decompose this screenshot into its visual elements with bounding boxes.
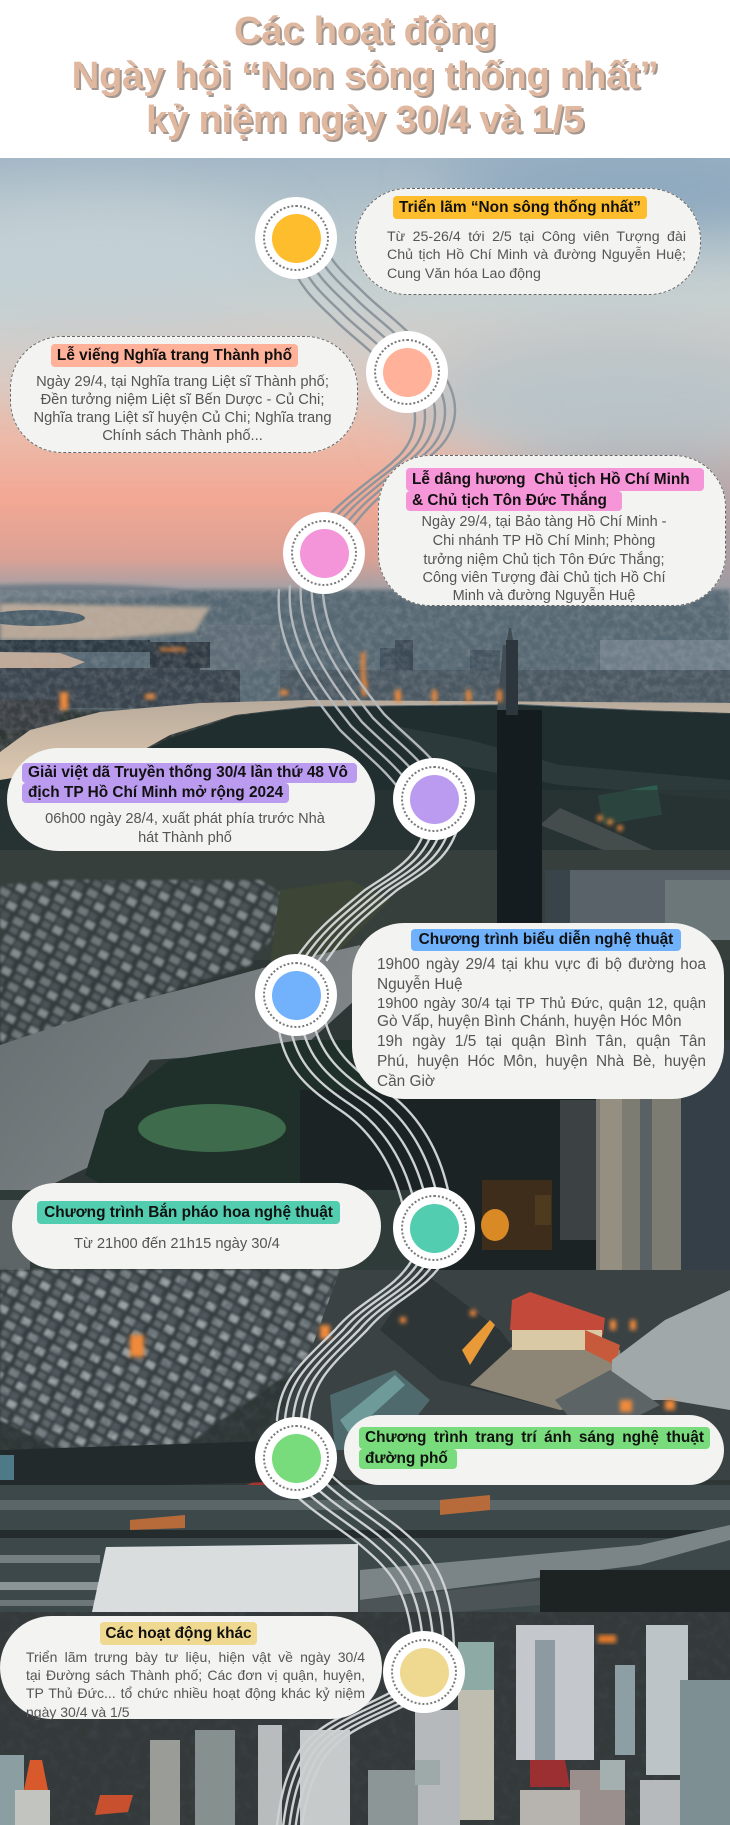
text block: 19h ngày 1/5 tại quận Bình Tân, quận Tân: [377, 1033, 706, 1050]
villas: [0, 1270, 350, 1470]
text block: [421, 514, 667, 604]
text block: [26, 1649, 365, 1720]
title: kỷ niệm ngày 30/4 và 1/5: [146, 98, 584, 140]
city lights: [60, 648, 675, 1412]
text block: Công viên Tượng đài Chủ tịch Hồ Chí: [422, 570, 666, 586]
highway: [0, 1485, 730, 1620]
dark land: [0, 705, 730, 900]
lower buildings: [0, 1612, 730, 1825]
text block: Chủ tịch Hồ Chí Minh và đường Nguyễn Huệ;: [387, 247, 686, 263]
text block: Gò Vấp, huyện Bình Chánh, huyện Hóc Môn: [377, 1013, 682, 1030]
title: [0, 0, 730, 158]
text block: Nghĩa trang Liệt sĩ huyện Củ Chi; Nghĩa trang: [33, 410, 332, 426]
marker: salmon circle: [366, 331, 448, 413]
title: Ngày hội “Non sông thống nhất”: [72, 54, 658, 96]
panel: trang trí ánh sáng: [344, 1415, 724, 1485]
text block: tưởng niệm Chủ tịch Tôn Đức Thắng;: [423, 552, 665, 568]
heading: Các hoạt động khác: [105, 1625, 252, 1642]
panel: biểu diễn nghệ thuật: [352, 923, 724, 1099]
text block: TP Thủ Đức... tổ chức nhiều hoạt động khác kỷ niệm: [26, 1685, 365, 1701]
text block: [33, 374, 332, 444]
park: [85, 1040, 400, 1200]
text block: Chính sách Thành phố...: [102, 428, 263, 444]
text block: Đền tưởng niệm Liệt sĩ Bến Dược - Củ Chi;: [41, 392, 324, 408]
marker: yellow circle: [255, 197, 337, 279]
text block: Nguyễn Huệ: [377, 976, 463, 993]
heading: Lễ dâng hương Chủ tịch Hồ Chí Minh: [412, 471, 690, 488]
text block: tại Đường sách Thành phố; Các đơn vị quận, huyện,: [26, 1667, 365, 1683]
mid block: [300, 1090, 730, 1280]
text block: 19h00 ngày 30/4 tại TP Thủ Đức, quận 12, quận: [377, 996, 706, 1012]
heading: Giải việt dã Truyền thống 30/4 lần thứ 48 Vô: [28, 764, 348, 781]
panel: bắn pháo hoa: [12, 1183, 381, 1269]
right buildings: [545, 870, 730, 940]
tower: [497, 628, 518, 712]
panel: lễ dâng hương: [378, 455, 726, 606]
heading: Triển lãm “Non sông thống nhất”: [399, 199, 641, 216]
text block: Triển lãm trưng bày tư liệu, hiện vật về ngày 30/4: [26, 1649, 365, 1665]
text block: hát Thành phố: [138, 830, 232, 846]
heading: & Chủ tịch Tôn Đức Thắng: [412, 492, 607, 509]
marker: green circle: [255, 1417, 337, 1499]
text block: ngày 30/4 và 1/5: [26, 1704, 130, 1720]
text block: Minh và đường Nguyễn Huệ: [453, 588, 635, 604]
left village: [0, 880, 300, 1050]
text block: [387, 229, 686, 282]
marker: pink circle: [283, 512, 365, 594]
marker: blue circle: [255, 954, 337, 1036]
lower river: [0, 945, 360, 1215]
text block: [45, 811, 325, 846]
text block: Từ 21h00 đến 21h15 ngày 30/4: [74, 1236, 280, 1252]
text block: Cần Giờ: [377, 1073, 435, 1090]
text block: 19h00 ngày 29/4 tại khu vực đi bộ đường hoa: [377, 956, 706, 973]
text block: 06h00 ngày 28/4, xuất phát phía trước Nhà: [45, 811, 325, 827]
text block: Ngày 29/4, tại Bảo tàng Hồ Chí Minh -: [421, 514, 667, 530]
text block: [377, 956, 706, 1090]
panel: lễ viếng: [10, 336, 358, 453]
heading: Chương trình biểu diễn nghệ thuật: [419, 931, 673, 948]
text block: Cung Văn hóa Lao động: [387, 266, 541, 282]
heading: [359, 1427, 710, 1469]
panel: triển lãm: [355, 188, 701, 295]
text block: Phú, huyện Hóc Môn, huyện Nhà Bè, huyện: [377, 1053, 706, 1070]
heading: đường phố: [365, 1450, 448, 1467]
centre and plaza: [250, 1270, 730, 1480]
heading: [100, 1622, 257, 1645]
panel: các hoạt động khác: [0, 1616, 382, 1719]
tall buildings: [681, 1040, 730, 1280]
heading: Chương trình trang trí ánh sáng nghệ thuật: [365, 1429, 704, 1446]
text block: Ngày 29/4, tại Nghĩa trang Liệt sĩ Thành phố;: [36, 374, 329, 390]
ribbon lines: [277, 232, 457, 1825]
white roof: [92, 1544, 358, 1612]
marker: teal circle: [393, 1187, 475, 1269]
heading: Lễ viếng Nghĩa trang Thành phố: [57, 347, 292, 364]
panel: giải việt dã: [7, 748, 375, 851]
heading: Chương trình Bắn pháo hoa nghệ thuật: [44, 1204, 333, 1221]
marker: purple circle: [393, 758, 475, 840]
text block: Chi nhánh TP Hồ Chí Minh; Phòng: [433, 533, 655, 549]
heading: địch TP Hồ Chí Minh mở rộng 2024: [28, 784, 283, 801]
heading: [22, 763, 357, 803]
title: Các hoạt động: [234, 8, 496, 52]
distant city haze: [0, 584, 730, 730]
river upper: [0, 700, 730, 790]
heading: [406, 468, 704, 511]
text block: Từ 25-26/4 tới 2/5 tại Công viên Tượng đài: [387, 229, 686, 245]
marker: sand circle: [383, 1631, 465, 1713]
